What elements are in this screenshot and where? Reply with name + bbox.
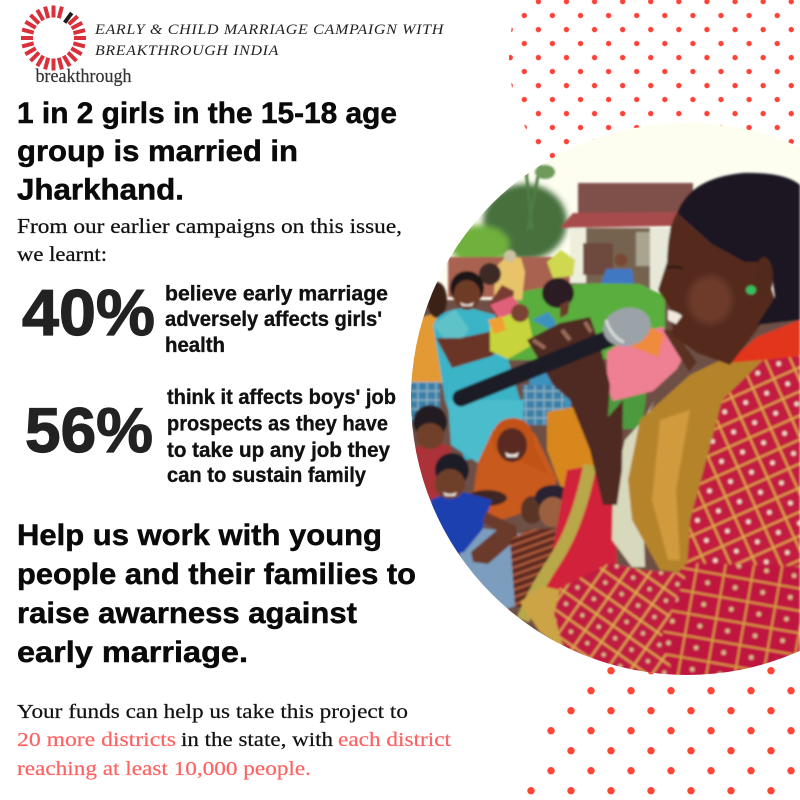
pink sari behind bbox=[607, 327, 683, 401]
main heading: 1 in 2 girls in the 15-18 age bbox=[17, 97, 397, 130]
trees bbox=[450, 165, 567, 265]
stat description 40%: health bbox=[165, 334, 225, 357]
stat number 56%: 56% bbox=[25, 396, 153, 466]
main heading: Jharkhand. bbox=[17, 174, 184, 206]
closing text: reaching at least 10,000 people. bbox=[17, 759, 311, 780]
campaign title: BREAKTHROUGH INDIA bbox=[95, 43, 279, 59]
stat description 40% bbox=[165, 282, 388, 357]
closing text: in the state, with bbox=[181, 730, 333, 751]
microphone bbox=[461, 302, 655, 398]
red scarf bbox=[727, 320, 800, 363]
woman's head bbox=[658, 173, 800, 365]
boy in plaid bbox=[523, 278, 574, 425]
man in blue bbox=[547, 250, 634, 287]
closing text bbox=[17, 702, 452, 780]
crowd base tone bbox=[405, 300, 800, 680]
circular photo: woman speaking into a microphone to a crowd bbox=[405, 118, 800, 690]
call to action heading bbox=[17, 519, 416, 669]
logo wordmark: breakthrough bbox=[36, 66, 132, 87]
campaign title bbox=[94, 22, 445, 59]
crowd: left woman in turquoise bbox=[410, 263, 534, 460]
brick wall bbox=[448, 257, 575, 297]
stat description 56%: prospects as they have bbox=[167, 412, 388, 436]
arm and hand bbox=[527, 317, 623, 505]
intro text: From our earlier campaigns on this issue, bbox=[17, 214, 402, 238]
crowd below: faces and clothes bbox=[410, 400, 597, 616]
stat description 56%: can to sustain family bbox=[167, 464, 366, 487]
stat description 40%: adversely affects girls' bbox=[165, 308, 382, 331]
red sari with gold fringe bbox=[546, 466, 618, 590]
dot pattern: bottom right bbox=[531, 671, 791, 791]
campaign title: EARLY & CHILD MARRIAGE CAMPAIGN WITH bbox=[94, 22, 445, 38]
stat description 56%: think it affects boys' job bbox=[167, 386, 396, 409]
main heading: group is married in bbox=[17, 135, 298, 168]
stat number 40%: 40% bbox=[22, 276, 155, 349]
stat: 40% bbox=[22, 276, 388, 357]
house bbox=[560, 183, 693, 290]
logo ring bbox=[21, 6, 86, 70]
closing text: Your funds can help us take this project to bbox=[17, 702, 408, 723]
stat description 56% bbox=[167, 386, 396, 487]
cream fringe and gold band bbox=[612, 355, 770, 573]
person with straw hat bbox=[494, 256, 525, 300]
stat description 56%: to take up any job they bbox=[167, 439, 390, 462]
green bushes bbox=[505, 283, 665, 360]
background person's arm bbox=[663, 330, 697, 372]
main heading bbox=[17, 97, 397, 206]
call to action heading: raise awarness against bbox=[17, 597, 357, 630]
intro text bbox=[17, 214, 402, 266]
closing text: 20 more districts bbox=[17, 730, 176, 751]
call to action heading: people and their families to bbox=[17, 558, 416, 591]
woman's dress bbox=[520, 345, 800, 690]
stat: 56% bbox=[25, 386, 396, 487]
logo: breakthrough bbox=[21, 6, 132, 87]
call to action heading: early marriage. bbox=[17, 636, 248, 669]
intro text: we learnt: bbox=[17, 242, 107, 266]
stat description 40%: believe early marriage bbox=[165, 282, 388, 306]
closing text: each district bbox=[338, 730, 452, 751]
call to action heading: Help us work with young bbox=[17, 519, 382, 552]
dot pattern: top right bbox=[509, 0, 794, 158]
